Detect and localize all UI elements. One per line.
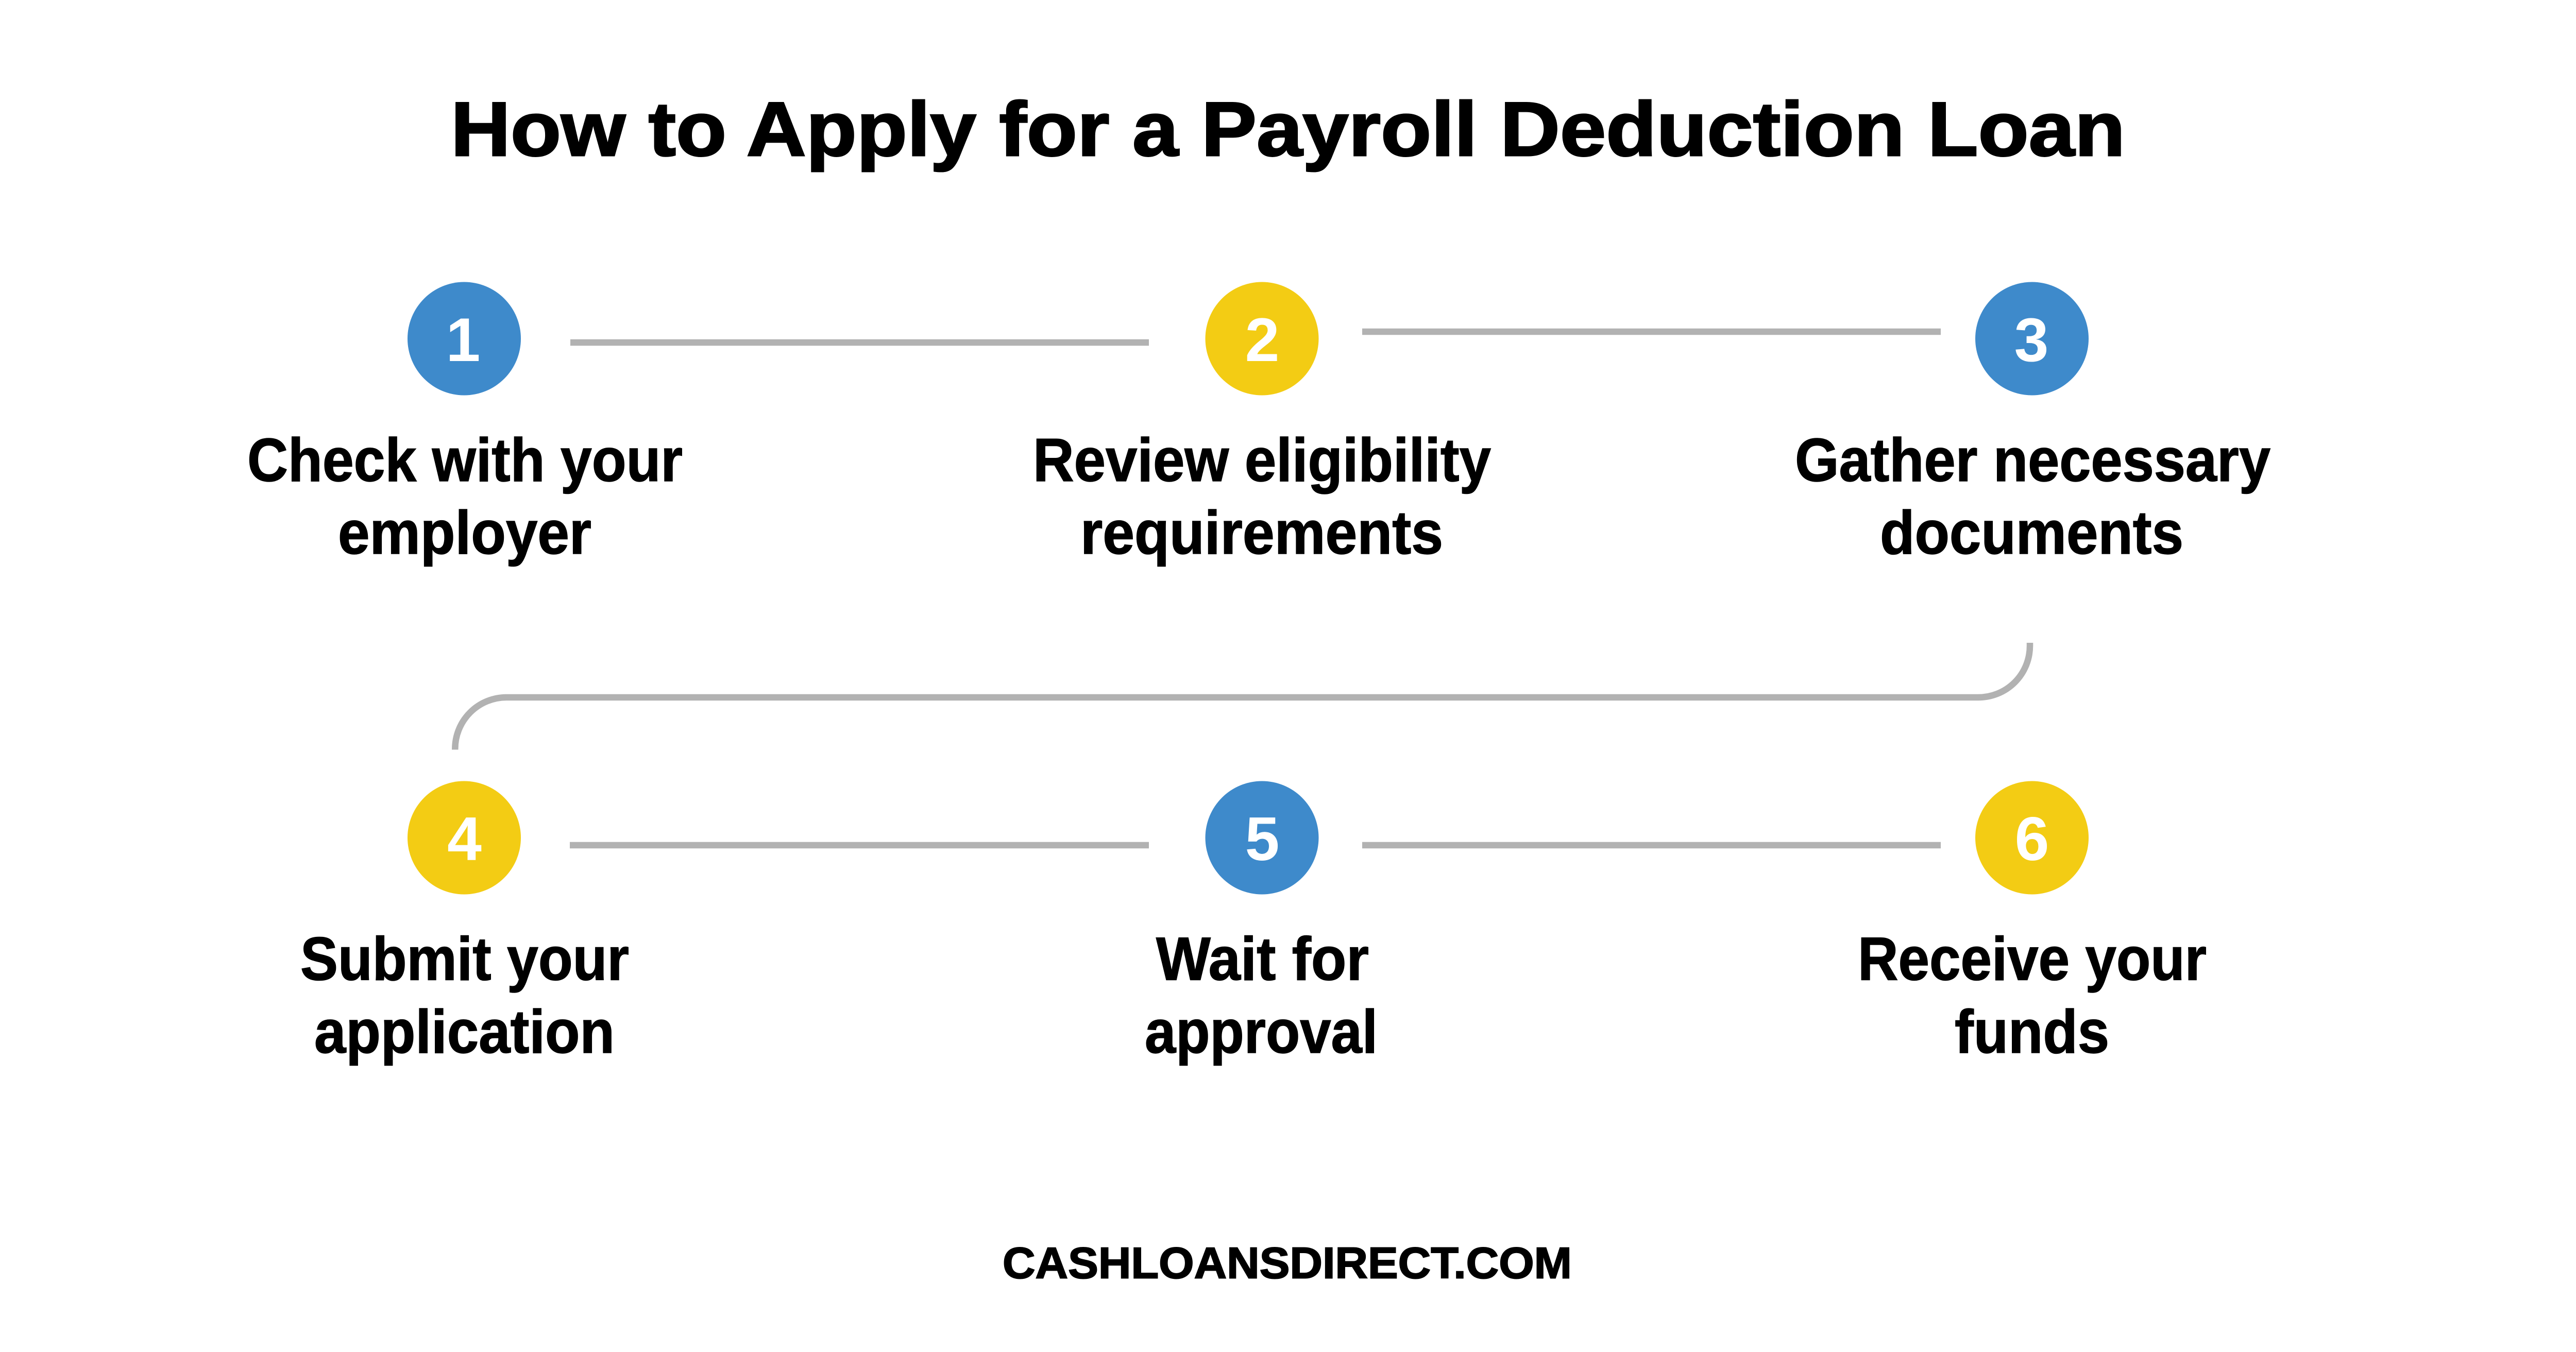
- step 5 label: Wait for: [1156, 925, 1369, 993]
- step 4 label: application: [314, 998, 615, 1066]
- step 5 badge: [1206, 781, 1319, 894]
- step 6 label: Receive your: [1858, 925, 2207, 993]
- connector: step 5 to step 6: [1362, 842, 1941, 848]
- step 5 badge: 5: [1245, 805, 1279, 874]
- step 4 label: Submit your: [300, 925, 629, 993]
- step 2 label: requirements: [1080, 499, 1443, 567]
- step 3 badge: 3: [2014, 305, 2048, 374]
- step 3 label: documents: [1880, 499, 2183, 567]
- step 6 label: funds: [1955, 998, 2109, 1066]
- connector: step 2 to step 3: [1362, 329, 1941, 335]
- step 5 label: approval: [1145, 998, 1378, 1066]
- step 4 badge: 4: [447, 805, 482, 874]
- step 3: [1795, 282, 2270, 567]
- step 3 badge: [1975, 282, 2089, 396]
- curved connector: step 3 to step 4: [455, 643, 2030, 750]
- connector: step 4 to step 5: [570, 842, 1149, 848]
- step 2 label: [1033, 426, 1491, 567]
- step 2 label: Review eligibility: [1033, 426, 1491, 494]
- connector: step 1 to step 2: [570, 339, 1149, 346]
- step 5: [1145, 781, 1378, 1066]
- footer website: CASHLOANSDIRECT.COM: [1003, 1239, 1572, 1288]
- step 6 label: [1858, 925, 2207, 1066]
- title: How to Apply for a Payroll Deduction Loan: [451, 86, 2125, 172]
- step 6 badge: 6: [2015, 805, 2049, 874]
- step 1: [247, 282, 683, 567]
- step 4 label: [300, 925, 629, 1066]
- step 1 label: [247, 426, 683, 567]
- step 3 label: Gather necessary: [1795, 426, 2270, 494]
- step 1 badge: 1: [446, 305, 480, 374]
- step 2: [1033, 282, 1491, 567]
- step 4 badge: [408, 781, 521, 894]
- step 2 badge: [1206, 282, 1319, 396]
- step 5 label: [1145, 925, 1378, 1066]
- step 1 label: Check with your: [247, 426, 683, 494]
- step 2 badge: 2: [1245, 305, 1279, 374]
- step 1 badge: [408, 282, 521, 396]
- step 1 label: employer: [338, 499, 591, 567]
- step 4: [300, 781, 629, 1066]
- step 6: [1858, 781, 2207, 1066]
- step 3 label: [1795, 426, 2270, 567]
- step 6 badge: [1975, 781, 2089, 894]
